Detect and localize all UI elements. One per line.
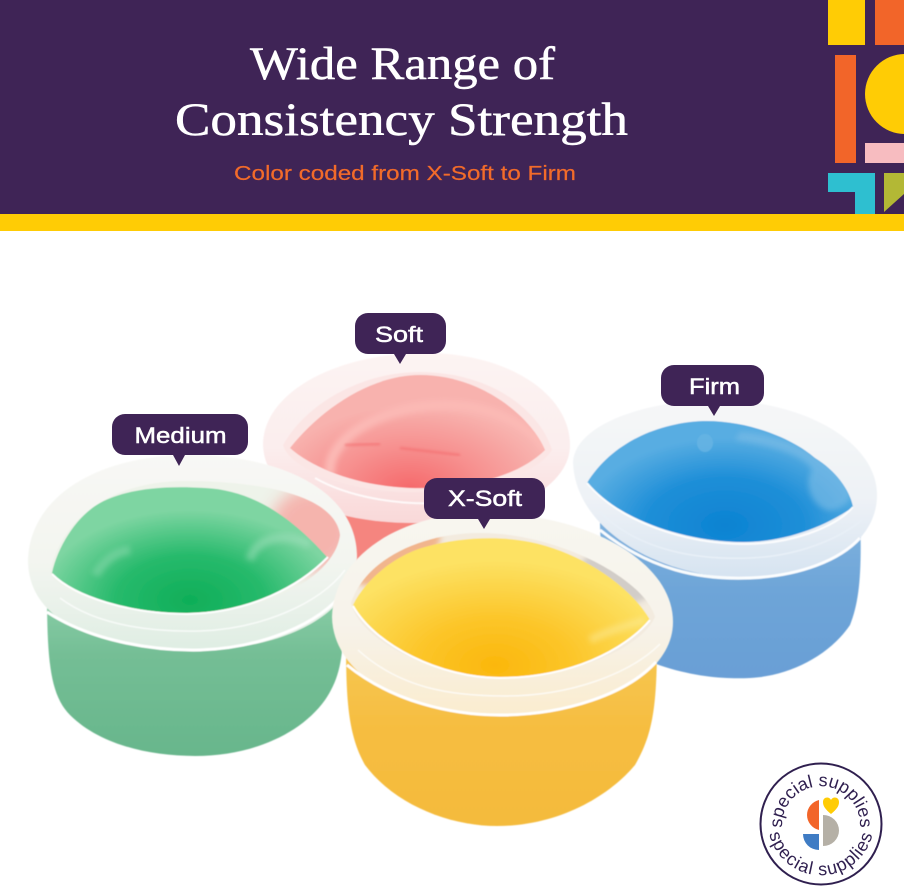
logo text: special supplies (772, 774, 870, 828)
rim highlight (315, 478, 440, 503)
tub: firm (blue) (573, 400, 877, 678)
label: Medium (112, 414, 248, 466)
interior wall and pink show-through (119, 482, 340, 582)
tub body (47, 590, 344, 756)
rim highlight (587, 483, 853, 544)
title (175, 38, 628, 146)
title: Consistency Strength (175, 94, 628, 146)
tub body (346, 640, 657, 826)
rim (332, 513, 673, 715)
header banner (0, 0, 904, 231)
label: X-Soft (424, 478, 545, 529)
label: X-Soft: X-Soft (448, 486, 522, 511)
label: Soft (355, 313, 446, 364)
tub: x-soft (yellow) (332, 512, 673, 826)
clay (52, 486, 327, 614)
logo mark (803, 798, 839, 850)
rim highlight (353, 606, 650, 678)
rim highlight (52, 557, 328, 614)
clay (586, 420, 854, 542)
rim (263, 353, 570, 523)
rim (28, 455, 357, 650)
label: Firm: Firm (689, 374, 740, 399)
label: Soft: Soft (375, 322, 423, 347)
tub: soft (red) (263, 353, 570, 575)
tub: medium (green) (28, 455, 357, 756)
logo text: special supplies (770, 832, 872, 876)
clay (352, 538, 650, 678)
geometric pattern (828, 0, 904, 214)
label: Medium: Medium (134, 423, 226, 448)
clay (290, 374, 546, 489)
interior wall colours (352, 533, 654, 635)
tub body (600, 500, 861, 678)
tub body (285, 480, 546, 575)
title: Wide Range of (250, 38, 555, 90)
logo text (770, 774, 872, 876)
logo badge: special supplies (760, 762, 882, 886)
rim (573, 400, 877, 578)
label: Firm (661, 365, 764, 416)
subtitle: Color coded from X-Soft to Firm (234, 162, 576, 185)
